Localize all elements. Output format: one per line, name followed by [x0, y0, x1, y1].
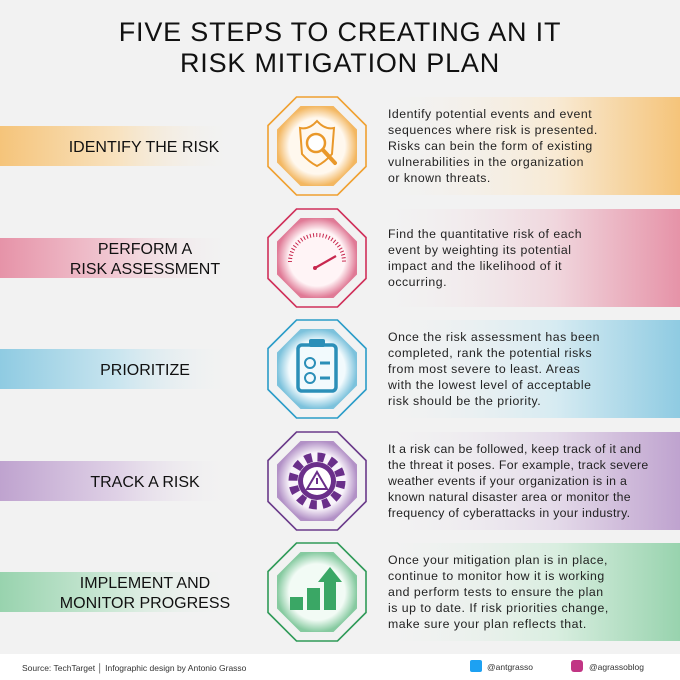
footer: @antgrasso: [487, 662, 533, 672]
step 4: track a risk: It a risk can be followed, keep track of it and: [388, 442, 641, 456]
step 3: prioritize: PRIORITIZE: [100, 362, 190, 379]
title: FIVE STEPS TO CREATING AN IT: [119, 17, 561, 47]
icon: twitter: [470, 660, 482, 672]
step 1: identify the risk: sequences where risk is presented.: [388, 123, 598, 137]
step 3: prioritize: from most severe to least. Areas: [388, 362, 580, 376]
step 5: implement and monitor: IMPLEMENT AND: [80, 575, 210, 592]
step 5: implement and monitor: [0, 543, 680, 641]
step 4: track a risk: [0, 432, 680, 530]
step 2: risk assessment: impact and the likelihood of it: [388, 259, 562, 273]
step 1: identify the risk: IDENTIFY THE RISK: [69, 139, 220, 156]
icon: instagram: [571, 660, 583, 672]
footer: [0, 654, 680, 680]
step 2: risk assessment: Find the quantitative risk of each: [388, 227, 582, 241]
footer: Source: TechTarget │ Infographic design by Antonio Grasso: [22, 663, 247, 674]
step 3: prioritize: completed, rank the potential risks: [388, 346, 592, 360]
footer: @agrassoblog: [589, 662, 644, 672]
step 4: track a risk: frequency of cyberattacks in your industry.: [388, 506, 630, 520]
step 5: implement and monitor: is up to date. If risk priorities change,: [388, 601, 609, 615]
step 3: prioritize: risk should be the priority.: [388, 394, 541, 408]
step 1: identify the risk: Risks can bein the form of existing: [388, 139, 593, 153]
step 2: risk assessment: occurring.: [388, 275, 447, 289]
step 2: risk assessment: PERFORM A: [98, 241, 192, 258]
step 3: prioritize: [0, 320, 680, 418]
step 1: identify the risk: [0, 97, 680, 195]
step 2: risk assessment: [0, 209, 680, 307]
step 3: prioritize: Once the risk assessment has been: [388, 330, 600, 344]
step 3: prioritize: with the lowest level of acceptable: [387, 378, 591, 392]
step 4: track a risk: weather events if your organization is in a: [387, 474, 627, 488]
step 5: implement and monitor: continue to monitor how it is working: [388, 569, 605, 583]
step 1: identify the risk: or known threats.: [388, 171, 491, 185]
step 2: risk assessment: event by weighting its potential: [388, 243, 571, 257]
step 4: track a risk: TRACK A RISK: [90, 474, 200, 491]
step 2: risk assessment: RISK ASSESSMENT: [70, 261, 220, 278]
step 1: identify the risk: vulnerabilities in the organization: [388, 155, 584, 169]
title: RISK MITIGATION PLAN: [180, 48, 500, 78]
step 4: track a risk: the threat it poses. For example, track severe: [388, 458, 649, 472]
step 5: implement and monitor: make sure your plan reflects that.: [388, 617, 587, 631]
title: [119, 17, 561, 78]
step 5: implement and monitor: MONITOR PROGRESS: [60, 595, 230, 612]
step 5: implement and monitor: and perform tests to ensure the plan: [388, 585, 604, 599]
step 1: identify the risk: Identify potential events and event: [388, 107, 592, 121]
step 4: track a risk: known natural disaster area or monitor the: [388, 490, 631, 504]
step 5: implement and monitor: Once your mitigation plan is in place,: [388, 553, 608, 567]
